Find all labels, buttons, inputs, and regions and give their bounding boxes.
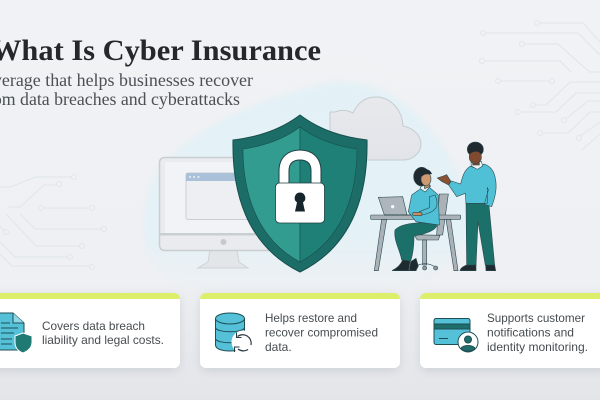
card 1 text: Covers data breach: [42, 319, 145, 333]
illustration: two people at a desk: [371, 142, 496, 271]
card 3 text: Supports customer: [487, 311, 585, 325]
card 1 accent bar: [0, 293, 180, 299]
card 2 text: [265, 311, 378, 354]
icon: desktop monitor: [160, 158, 290, 268]
standing man: [437, 142, 496, 271]
card 1 text: liability and legal costs.: [42, 333, 164, 347]
card 3 text: [487, 311, 588, 354]
card 1: [0, 293, 180, 368]
icon: cloud: [330, 97, 421, 160]
card 2 text: recover compromised: [265, 326, 378, 340]
icon: shield with padlock: [233, 115, 367, 272]
icon: credit card with user: [434, 318, 478, 352]
card 3: [420, 293, 600, 368]
card 3 accent bar: [420, 293, 600, 299]
title: What Is Cyber Insurance: [0, 34, 321, 67]
card 2 text: Helps restore and: [265, 311, 357, 325]
card 1 panel: [0, 293, 180, 368]
circuit pattern: top right: [480, 20, 600, 150]
card 2 panel: [200, 293, 400, 368]
card 2: [200, 293, 400, 368]
card 3 text: notifications and: [487, 326, 574, 340]
circuit pattern: left: [0, 174, 106, 270]
chair: [412, 194, 448, 270]
subtitle: [0, 70, 253, 109]
background blob: [144, 82, 469, 288]
card 2 accent bar: [200, 293, 400, 299]
desk: [371, 215, 461, 271]
card 3 text: identity monitoring.: [487, 340, 588, 354]
card 1 text: [42, 319, 164, 347]
laptop: [378, 197, 420, 215]
seated woman: [392, 167, 439, 271]
card 3 panel: [420, 293, 600, 368]
icon: document with shield: [0, 313, 32, 353]
card 2 text: data.: [265, 340, 292, 354]
icon: database with restore arrows: [216, 313, 254, 354]
